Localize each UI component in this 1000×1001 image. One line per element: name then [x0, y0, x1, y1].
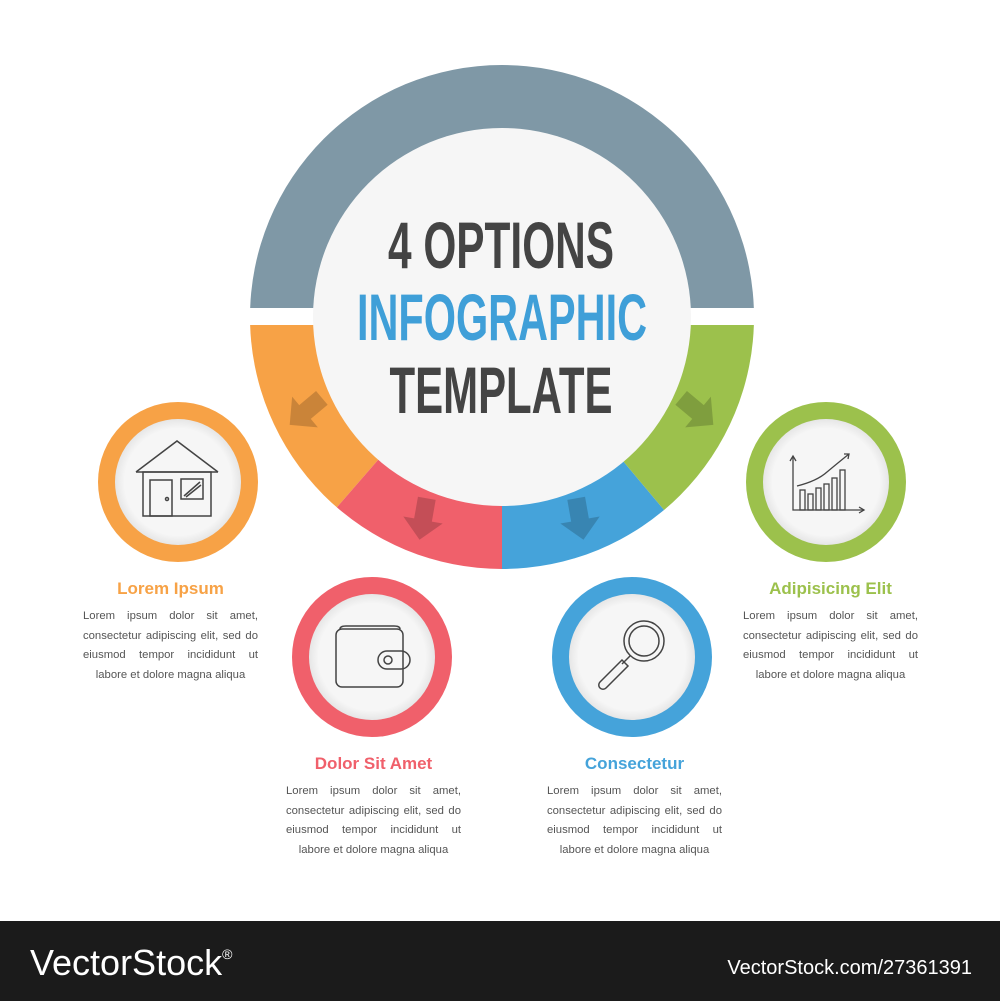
- footer bar: [0, 921, 1000, 1001]
- title: TEMPLATE: [390, 353, 612, 427]
- text block: Consectetur: [547, 754, 722, 856]
- footer bar: ®: [222, 946, 233, 962]
- icon circle: blue magnifier: [552, 577, 712, 737]
- text block: Lorem Ipsum: Lorem Ipsum: [117, 579, 224, 598]
- text block: Dolor Sit Amet: Lorem ipsum dolor sit amet, consectetur adipiscing elit, sed do eiusmod tempor incididunt ut labore et dolore magna aliqua: [286, 785, 461, 856]
- center circle: [313, 128, 691, 506]
- arrow: red: [400, 495, 447, 543]
- ring: gray top segment: [250, 65, 754, 308]
- footer bar: VectorStock.com/27361391: [727, 957, 972, 979]
- arrow: orange: [277, 383, 335, 440]
- text block: Adipisicing Elit: Adipisicing Elit: [769, 579, 892, 598]
- icon circle: green chart: [746, 402, 906, 562]
- icon circle: red wallet: [292, 577, 452, 737]
- segment: orange: [250, 325, 378, 508]
- title: [357, 208, 647, 427]
- title: 4 OPTIONS: [388, 208, 614, 282]
- segment: green: [624, 325, 754, 510]
- text block: Adipisicing Elit: Lorem ipsum dolor sit amet, consectetur adipiscing elit, sed do eiusmod tempor incididunt ut labore et dolore magna aliqua: [743, 610, 918, 680]
- footer bar: VectorStock: [30, 942, 222, 983]
- text block: Consectetur: Consectetur: [585, 754, 684, 773]
- text block: Lorem Ipsum: Lorem ipsum dolor sit amet, consectetur adipiscing elit, sed do eiusmod tempor incididunt ut labore et dolore magna aliqua: [83, 610, 258, 680]
- arrow: green: [668, 383, 726, 440]
- text block: Consectetur: Lorem ipsum dolor sit amet, consectetur adipiscing elit, sed do eiusmod tempor incididunt ut labore et dolore magna aliqua: [547, 785, 722, 856]
- icon circle: orange house: [98, 402, 258, 562]
- ring: colored lower segments: [250, 325, 754, 569]
- text block: Dolor Sit Amet: Dolor Sit Amet: [315, 754, 432, 773]
- title: INFOGRAPHIC: [357, 280, 647, 354]
- arrow: blue: [556, 495, 603, 543]
- segment: red: [336, 460, 502, 569]
- text block: Dolor Sit Amet: [286, 754, 461, 856]
- text block: Lorem Ipsum: [83, 579, 258, 680]
- segment: blue: [502, 462, 664, 569]
- text block: Adipisicing Elit: [743, 579, 918, 680]
